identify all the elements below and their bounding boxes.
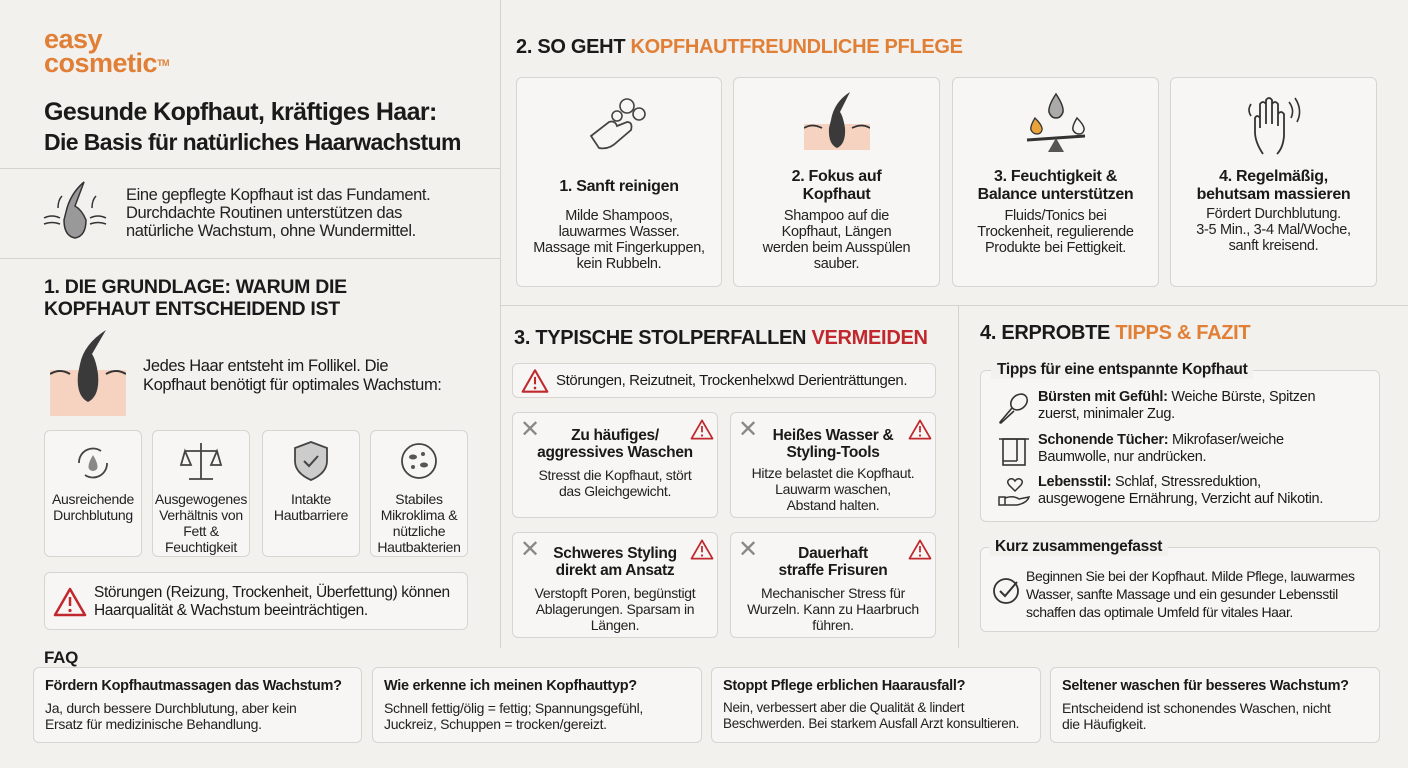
- summary box: Wasser, sanfte Massage und ein gesunder Lebensstil: [1026, 586, 1338, 602]
- tips box: [980, 370, 1380, 522]
- faq 4: Entscheidend ist schonendes Waschen, nicht: [1062, 700, 1331, 716]
- text: Tipps für eine entspannte Kopfhaut: [997, 361, 1247, 378]
- faq 4: [1050, 667, 1380, 743]
- tips box: ausgewogene Ernährung, Verzicht auf Nikotin.: [1038, 491, 1323, 507]
- icon: follicle: [50, 330, 126, 416]
- summary box: [980, 547, 1380, 632]
- FAQ heading: FAQ: [44, 648, 78, 667]
- icon: hair follicle intro: [44, 181, 106, 239]
- faq 3: Nein, verbessert aber die Qualität & lindert: [723, 700, 964, 715]
- card: massieren: 3-5 Min., 3-4 Mal/Woche,: [1196, 222, 1351, 238]
- card: Sanft reinigen: Milde Shampoos,: [565, 208, 673, 224]
- logo: [44, 24, 169, 78]
- pitfall: heißes Wasser: [730, 412, 936, 518]
- dividers: [500, 0, 501, 648]
- card: Hautbarriere: Intakte Hautbarriere: [274, 491, 348, 523]
- pitfall: frisuren: straffe Frisuren: [779, 562, 887, 579]
- tips box: Schonende Tücher: Mikrofaser/weiche: [1038, 432, 1284, 448]
- card: Fokus auf Kopfhaut: [733, 77, 940, 287]
- tips box: Lebensstil: Schlaf, Stressreduktion,: [1038, 474, 1261, 490]
- faq 1: Ja, durch bessere Durchblutung, aber kein: [45, 700, 297, 716]
- faq 2: Juckreiz, Schuppen = trocken/gereizt.: [384, 716, 607, 732]
- logo: cosmeticTM: [44, 48, 169, 78]
- pitfall: waschen: ✕: [520, 416, 540, 443]
- card: Durchblutung: [44, 430, 142, 557]
- text: follicle: [143, 357, 442, 394]
- section 2 heading: 2. SO GEHT KOPFHAUTFREUNDLICHE PFLEGE: [516, 36, 963, 58]
- tips box: zuerst, minimaler Zug.: [1038, 406, 1175, 422]
- tips box: Baumwolle, nur andrücken.: [1038, 449, 1206, 465]
- section 3 heading: 3. TYPISCHE STOLPERFALLEN VERMEIDEN: [514, 327, 928, 349]
- card: Balance: Ausgewogenes Verhältnis von Fett & Feuchtigkeit: [155, 491, 247, 555]
- banner warning: Störungen, Reizutneit, Trockenhelxwd Derienträttungen.: [556, 372, 907, 389]
- intro text: Durchdachte Routinen unterstützen das: [126, 204, 402, 222]
- faq 2: Schnell fettig/ölig = fettig; Spannungsgefühl,: [384, 700, 643, 716]
- faq 2: Wie erkenne ich meinen Kopfhauttyp?: [384, 678, 637, 694]
- faq 1: Fördern Kopfhautmassagen das Wachstum?: [45, 678, 342, 694]
- card: Fokus auf Kopfhaut: sauber.: [814, 256, 859, 272]
- card: Feuchtigkeit: [952, 77, 1159, 287]
- pitfall: heißes Wasser: Abstand halten.: [787, 497, 879, 513]
- card: Hautbarriere: [262, 430, 360, 557]
- summary box: schaffen das optimale Umfeld für vitales Haar.: [1026, 604, 1293, 620]
- card: massieren: Fördert Durchblutung.: [1206, 206, 1341, 222]
- banner warning: [512, 363, 936, 398]
- icon: heart hand: [998, 478, 1030, 506]
- text: follicle: Jedes Haar entsteht im Follikel. Die: [143, 357, 388, 375]
- pitfall: styling: Ablagerungen. Sparsam in: [536, 601, 694, 617]
- pitfall: styling: Längen.: [591, 617, 639, 633]
- card: Feuchtigkeit: Fluids/Tonics bei: [1004, 208, 1107, 224]
- card: Balance: [152, 430, 250, 557]
- card: massieren: [1170, 77, 1377, 287]
- pitfall: heißes Wasser: Heißes Wasser &: [773, 427, 893, 444]
- card: massieren: 4. Regelmäßig,: [1219, 168, 1328, 185]
- intro text: [126, 186, 430, 240]
- text: Kurz zusammengefasst: [995, 538, 1162, 555]
- card: Sanft reinigen: [516, 77, 722, 287]
- card: Sanft reinigen: 1. Sanft reinigen: [559, 178, 679, 195]
- pitfall: frisuren: führen.: [812, 617, 854, 633]
- faq 3: Stoppt Pflege erblichen Haarausfall?: [723, 678, 965, 694]
- title: [44, 98, 461, 155]
- section 1 heading: [44, 276, 347, 320]
- card: massieren: sanft kreisend.: [1229, 238, 1318, 254]
- pitfall: heißes Wasser: Hitze belastet die Kopfhaut.: [752, 465, 914, 481]
- card: Sanft reinigen: kein Rubbeln.: [577, 256, 661, 272]
- faq 4: Seltener waschen für besseres Wachstum?: [1062, 678, 1349, 694]
- card: Fokus auf Kopfhaut: Shampoo auf die: [784, 208, 889, 224]
- pitfall: heißes Wasser: Styling-Tools: [786, 444, 880, 461]
- warning box: Störungen (Reizung, Trockenheit, Überfettung) können: [94, 584, 450, 601]
- card: Mikroklima: Stabiles Mikroklima & nützliche Hautbakterien: [377, 491, 461, 555]
- faq 2: [372, 667, 702, 743]
- pitfall: frisuren: Mechanischer Stress für: [761, 585, 905, 601]
- pitfall: heißes Wasser: ✕: [738, 416, 758, 443]
- card: Feuchtigkeit: 3. Feuchtigkeit &: [994, 168, 1117, 185]
- icon: towel: [999, 438, 1029, 466]
- section 1 heading: 1. DIE GRUNDLAGE: WARUM DIE: [44, 276, 347, 298]
- pitfall: waschen: [512, 412, 718, 518]
- card: Sanft reinigen: lauwarmes Wasser.: [559, 224, 679, 240]
- text: follicle: Kopfhaut benötigt für optimales Wachstum:: [143, 376, 442, 394]
- pitfall: frisuren: Dauerhaft: [798, 545, 868, 562]
- section 1 heading: KOPFHAUT ENTSCHEIDEND IST: [44, 298, 340, 320]
- card: Fokus auf Kopfhaut: Kopfhaut, Längen: [782, 224, 891, 240]
- faq 4: die Häufigkeit.: [1062, 716, 1146, 732]
- intro text: natürliche Wachstum, ohne Wundermittel.: [126, 222, 416, 240]
- card: Feuchtigkeit: Produkte bei Fettigkeit.: [985, 240, 1126, 256]
- pitfall: frisuren: Wurzeln. Kann zu Haarbruch: [747, 601, 919, 617]
- warning box: [44, 572, 468, 630]
- pitfall: frisuren: [730, 532, 936, 638]
- section 4 heading: 4. ERPROBTE TIPPS & FAZIT: [980, 322, 1250, 344]
- card: Fokus auf Kopfhaut: werden beim Ausspülen: [763, 240, 910, 256]
- pitfall: styling: Schweres Styling: [553, 545, 677, 562]
- faq 1: [33, 667, 362, 743]
- pitfall: waschen: Zu häufiges/: [571, 427, 659, 444]
- faq 1: Ersatz für medizinische Behandlung.: [45, 716, 262, 732]
- title: Gesunde Kopfhaut, kräftiges Haar:: [44, 98, 437, 126]
- pitfall: waschen: das Gleichgewicht.: [559, 483, 671, 499]
- pitfall: heißes Wasser: Lauwarm waschen,: [775, 481, 891, 497]
- card: massieren: behutsam massieren: [1197, 186, 1350, 203]
- summary box: Beginnen Sie bei der Kopfhaut. Milde Pflege, lauwarmes: [1026, 568, 1355, 584]
- pitfall: styling: Verstopft Poren, begünstigt: [535, 585, 695, 601]
- card: Sanft reinigen: Massage mit Fingerkuppen,: [533, 240, 705, 256]
- title: Die Basis für natürliches Haarwachstum: [44, 129, 461, 155]
- icon: check: [993, 578, 1019, 604]
- logo: easy: [44, 24, 102, 54]
- faq 3: [711, 667, 1041, 743]
- card: Feuchtigkeit: Balance unterstützen: [978, 186, 1133, 203]
- card: Fokus auf Kopfhaut: Kopfhaut: [803, 186, 870, 203]
- icon: brush: [999, 393, 1028, 424]
- pitfall: styling: direkt am Ansatz: [556, 562, 674, 579]
- card: Fokus auf Kopfhaut: 2. Fokus auf: [792, 168, 881, 185]
- pitfall: waschen: Stresst die Kopfhaut, stört: [538, 467, 691, 483]
- warning box: Haarqualität & Wachstum beeinträchtigen.: [94, 602, 368, 619]
- pitfall: styling: ✕: [520, 536, 540, 563]
- pitfall: waschen: aggressives Waschen: [537, 444, 693, 461]
- card: Mikroklima: [370, 430, 468, 557]
- tips box: Bürsten mit Gefühl: Weiche Bürste, Spitzen: [1038, 389, 1315, 405]
- intro text: Eine gepflegte Kopfhaut ist das Fundament.: [126, 186, 430, 204]
- card: Durchblutung: Ausreichende Durchblutung: [52, 491, 134, 523]
- pitfall: frisuren: ✕: [738, 536, 758, 563]
- card: Feuchtigkeit: Trockenheit, regulierende: [977, 224, 1134, 240]
- pitfall: styling: [512, 532, 718, 638]
- faq 3: Beschwerden. Bei starkem Ausfall Arzt konsultieren.: [723, 716, 1019, 731]
